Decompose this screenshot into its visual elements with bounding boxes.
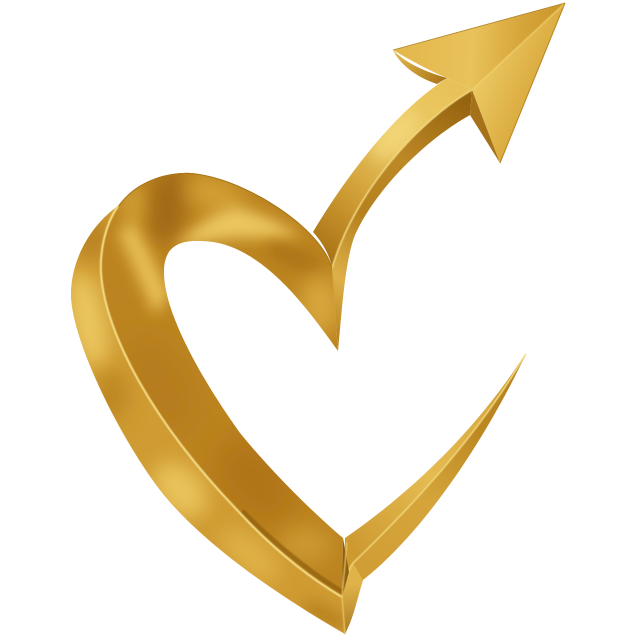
arrow shaft upper face (313, 78, 472, 268)
arrow shaft lower face (332, 90, 472, 351)
right heart band upper face (344, 353, 526, 578)
arrowhead ridge (472, 3, 565, 90)
arrowhead barb shadow (470, 90, 500, 163)
arrowhead right face (472, 3, 565, 163)
heart arrow artwork (60, 3, 565, 636)
main ribbon face (101, 172, 343, 597)
heart apex crease (342, 538, 349, 597)
right heart band lower face (342, 354, 526, 634)
apex highlight (342, 542, 347, 634)
icon: golden heart arrow (71, 2, 566, 634)
outer heart band (71, 206, 345, 634)
arrowhead left wing (393, 50, 447, 84)
arrowhead upper face (393, 3, 565, 90)
ribbon highlight edge (101, 206, 342, 597)
arrowhead (393, 3, 565, 163)
